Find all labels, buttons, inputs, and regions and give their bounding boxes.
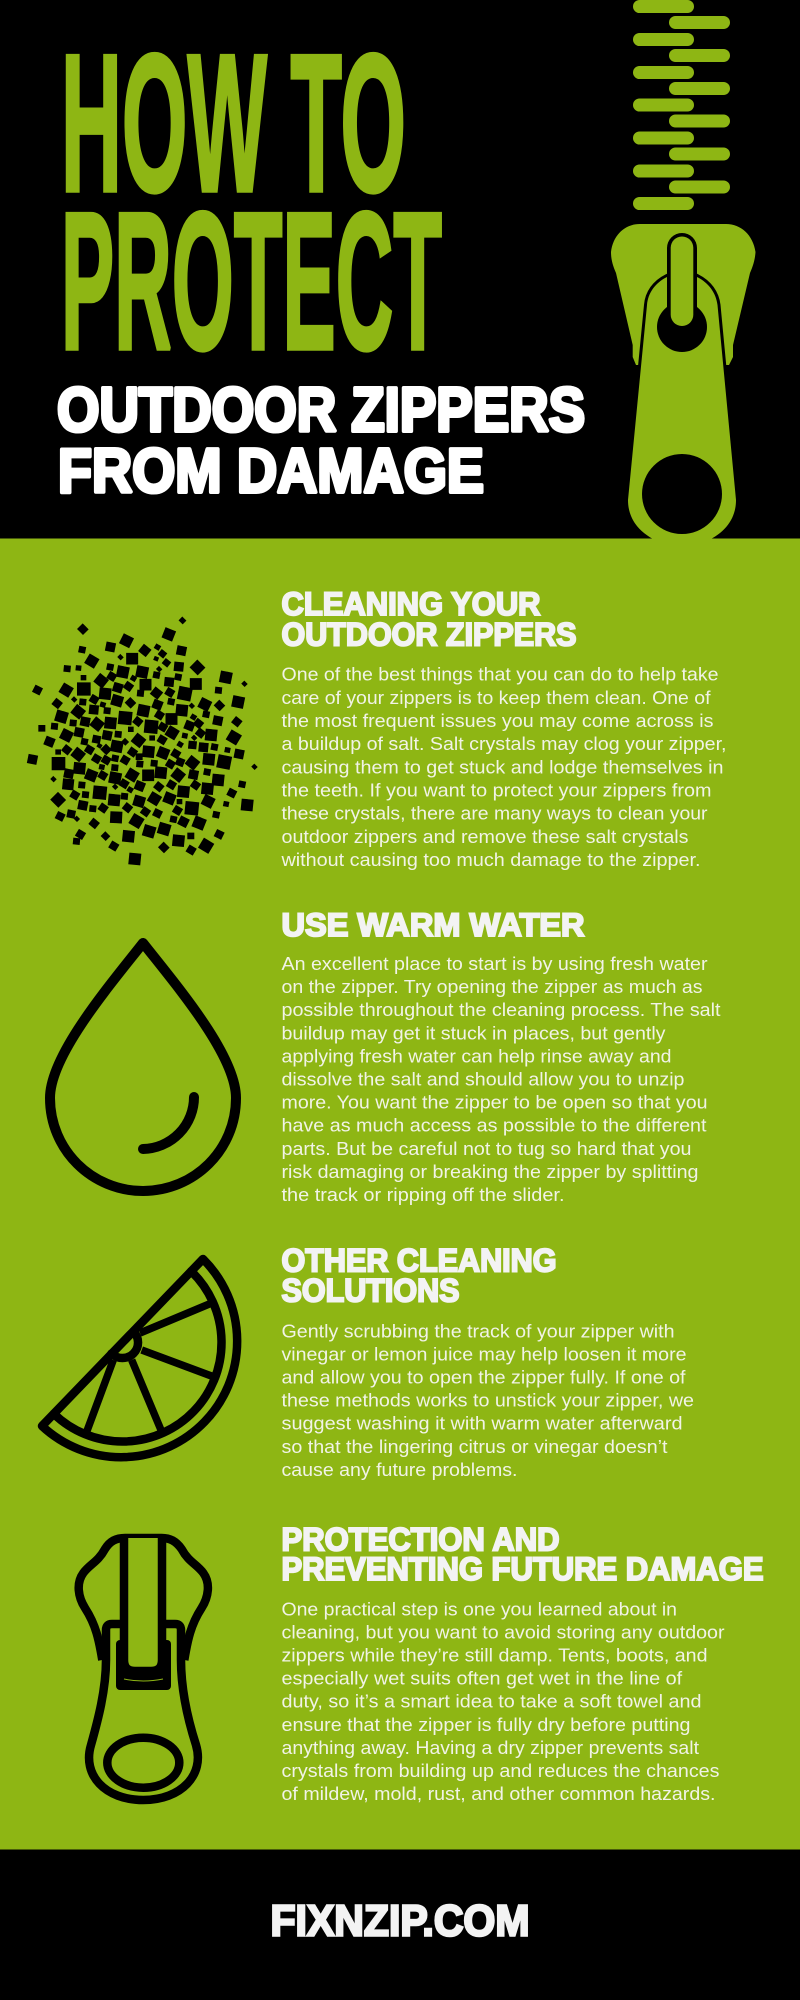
green content panel <box>0 538 800 1850</box>
body text: outdoor zippers and remove these salt crystals <box>282 826 688 847</box>
icon: water drop <box>50 943 236 1191</box>
body text: without causing too much damage to the zipper. <box>280 849 700 870</box>
subtitle line 1: OUTDOOR ZIPPERS <box>57 375 585 445</box>
title <box>57 13 585 506</box>
heading: OUTDOOR ZIPPERS <box>282 616 576 652</box>
section: use warm water <box>282 907 720 1205</box>
heading: PREVENTING FUTURE DAMAGE <box>282 1551 764 1587</box>
body text: possible throughout the cleaning process. The salt <box>282 999 720 1020</box>
section: protection and preventing future damage <box>282 1522 764 1804</box>
section: cleaning your outdoor zippers <box>280 586 726 870</box>
body text: more. You want the zipper to be open so that you <box>282 1092 708 1113</box>
body text: An excellent place to start is by using fresh water <box>282 953 708 974</box>
body text: One of the best things that you can do to help take <box>282 664 718 685</box>
heading: PROTECTION AND <box>282 1522 560 1558</box>
body text: suggest washing it with warm water afterward <box>282 1413 682 1434</box>
pull tab small hole <box>657 302 707 352</box>
body text: crystals from building up and reduces the chances <box>282 1760 720 1781</box>
heading <box>282 1242 556 1308</box>
body text: the track or ripping off the slider. <box>282 1184 564 1205</box>
body text: ensure that the zipper is fully dry before putting <box>282 1714 690 1735</box>
icon: salt crystals <box>32 620 255 859</box>
body text: parts. But be careful not to tug so hard that you <box>282 1138 692 1159</box>
body text: vinegar or lemon juice may help loosen it more <box>282 1343 686 1364</box>
body text: especially wet suits often get wet in the line of <box>282 1668 683 1689</box>
body text: zippers while they’re still damp. Tents, boots, and <box>282 1644 708 1666</box>
body text: the most frequent issues you may come across is <box>282 710 714 731</box>
body text: risk damaging or breaking the zipper by splitting <box>282 1161 698 1182</box>
body text: these crystals, there are many ways to clean your <box>282 803 708 824</box>
body text: so that the lingering citrus or vinegar doesn’t <box>282 1436 668 1457</box>
heading <box>282 1522 764 1587</box>
body text: have as much access as possible to the different <box>282 1115 706 1136</box>
zipper teeth <box>640 6 724 204</box>
section: other cleaning solutions <box>282 1242 694 1480</box>
body text: and allow you to open the zipper fully. If one of <box>282 1366 686 1388</box>
body text: causing them to get stuck and lodge themselves in <box>282 756 724 777</box>
body text: anything away. Having a dry zipper prevents salt <box>282 1737 699 1758</box>
heading: OTHER CLEANING <box>282 1242 556 1278</box>
heading <box>282 586 576 652</box>
heading: USE WARM WATER <box>282 907 584 943</box>
body text: One practical step is one you learned about in <box>282 1598 677 1619</box>
illustration: large zipper <box>611 6 756 541</box>
body text: the teeth. If you want to protect your zippers from <box>282 780 712 800</box>
heading: CLEANING YOUR <box>282 586 540 622</box>
body text: on the zipper. Try opening the zipper as much as <box>282 976 702 997</box>
body text: duty, so it’s a smart idea to take a soft towel and <box>282 1691 702 1712</box>
body text <box>282 1320 694 1480</box>
body text: cleaning, but you want to avoid storing any outdoor <box>282 1621 724 1642</box>
body text: a buildup of salt. Salt crystals may clog your zipper, <box>282 733 726 754</box>
body text: buildup may get it stuck in places, but gently <box>282 1022 666 1043</box>
body text: applying fresh water can help rinse away and <box>282 1045 672 1066</box>
icon: lemon slice <box>42 1259 237 1457</box>
subtitle line 2: FROM DAMAGE <box>58 436 484 506</box>
body text: these methods works to unstick your zipper, we <box>282 1390 694 1411</box>
body text: of mildew, mold, rust, and other common hazards. <box>282 1783 716 1804</box>
body text: Gently scrubbing the track of your zipper with <box>282 1320 674 1341</box>
zipper slider body <box>611 224 756 365</box>
slider rod outline <box>667 233 697 329</box>
zipper pull tab <box>628 274 736 541</box>
heading: SOLUTIONS <box>282 1272 460 1308</box>
footer url: FIXNZIP.COM <box>270 1897 530 1946</box>
body text <box>280 664 726 870</box>
body text: care of your zippers is to keep them clean. One of <box>282 687 711 708</box>
body text <box>282 953 720 1205</box>
slider rod <box>671 236 693 326</box>
body text <box>282 1598 724 1804</box>
body text: cause any future problems. <box>282 1459 518 1480</box>
body text: dissolve the salt and should allow you to unzip <box>282 1068 684 1090</box>
pull tab large hole <box>642 454 722 534</box>
icon: zipper outline <box>79 1538 208 1800</box>
